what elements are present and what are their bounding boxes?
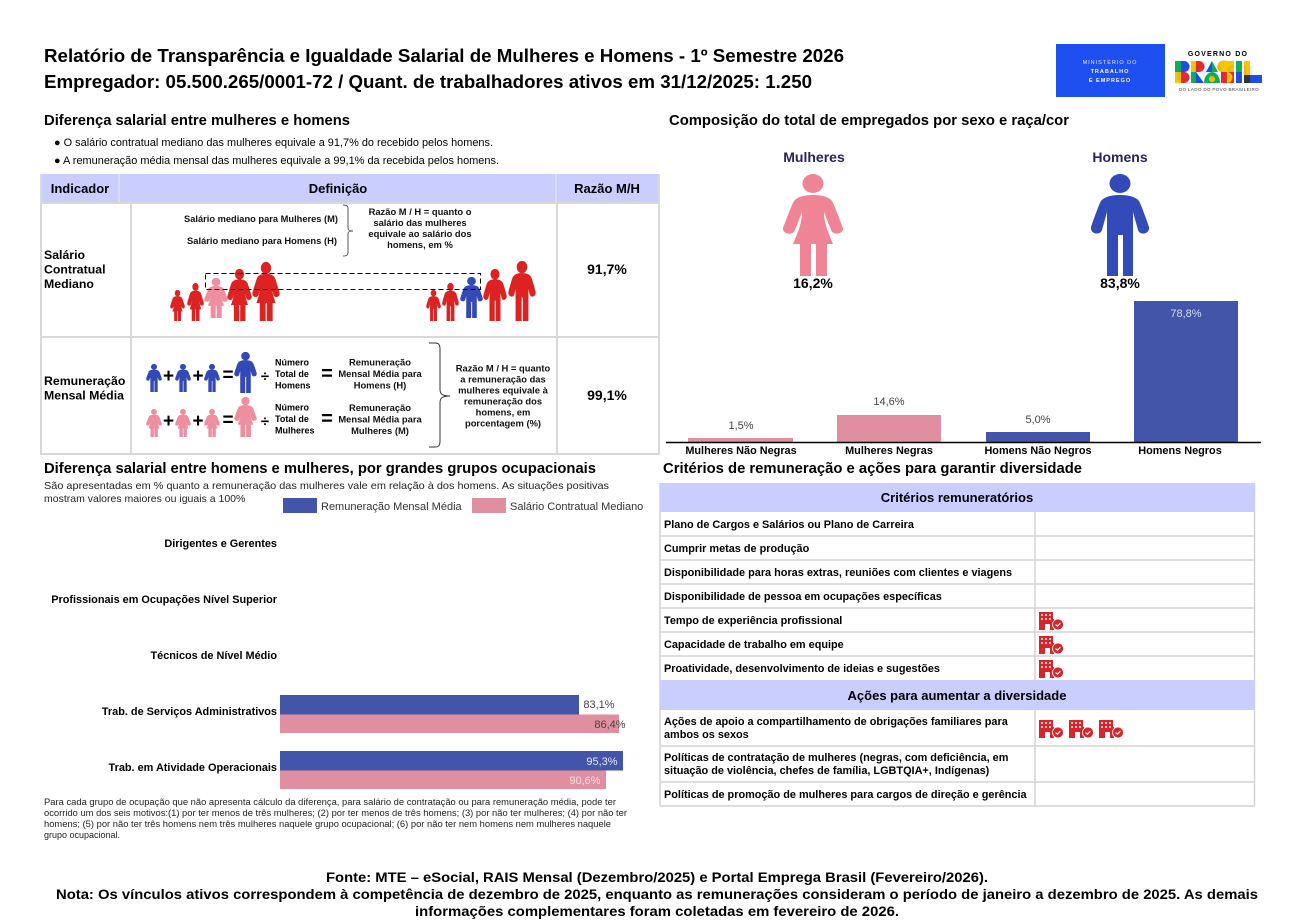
header: criteria: Critérios remuneratórios bbox=[881, 490, 1033, 505]
logo: Ministério do Trabalho e Emprego bbox=[1056, 44, 1165, 97]
title: Empregador: 05.500.265/0001-72 / Quant. de trabalhadores ativos em 31/12/2025: 1.250 bbox=[44, 72, 812, 92]
section: workforce composition bbox=[666, 113, 1261, 457]
men formula: + bbox=[163, 366, 174, 387]
ratio explanation bbox=[456, 362, 551, 428]
horizontal bar chart: Trab. de Serviços Administrativos bbox=[102, 706, 277, 718]
footnote bbox=[44, 797, 627, 840]
bullet text: median salary: ● O salário contratual mediano das mulheres equivale a 91,7% do recebido pelos homens. bbox=[54, 137, 493, 149]
women share: Mulheres bbox=[783, 149, 845, 165]
bar chart: sex and race bbox=[666, 301, 1261, 457]
row label: Mensal Média bbox=[44, 388, 124, 402]
footnote: Para cada grupo de ocupação que não apresenta cálculo da diferença, para salário de contratação ou para remuneração média, pode ter bbox=[44, 797, 616, 807]
ratio explanation: Razão M / H = quanto bbox=[456, 362, 551, 374]
footer source and note: informações complementares foram coletadas em fevereiro de 2026. bbox=[415, 903, 899, 919]
men share: Homens bbox=[1092, 149, 1148, 165]
bar chart: sex and race: Mulheres Não Negras bbox=[685, 445, 797, 457]
dashed highlight bbox=[206, 274, 480, 290]
bullet text: average pay: ● A remuneração média mensal das mulheres equivale a 99,1% da recebida pelos homens. bbox=[54, 155, 499, 167]
logo: Governo do Brasil: BRASIL bbox=[1176, 62, 1262, 85]
logo: Ministério do Trabalho e Emprego: TRABALHO bbox=[1091, 69, 1129, 75]
I bbox=[1236, 61, 1242, 72]
L bbox=[1244, 61, 1250, 75]
header: diversity actions bbox=[660, 680, 1255, 710]
horizontal bar chart: Profissionais em Ocupações Nível Superior bbox=[51, 594, 278, 606]
header: diversity actions: Ações para aumentar a diversidade bbox=[848, 688, 1066, 703]
criteria rows: Plano de Cargos e Salários ou Plano de Carreira bbox=[664, 519, 915, 531]
footnote: grupo ocupacional. bbox=[44, 830, 120, 840]
criteria rows: Tempo de experiência profissional bbox=[664, 615, 842, 627]
criteria rows: Disponibilidade para horas extras, reuniões com clientes e viagens bbox=[664, 567, 1012, 579]
women formula: Mensal Média para bbox=[338, 414, 422, 424]
table header: Indicador bbox=[51, 181, 109, 196]
men formula: Homens (H) bbox=[354, 380, 406, 390]
icon group: men bbox=[426, 262, 535, 321]
women formula: = bbox=[321, 408, 333, 430]
ratio explanation: Razão M / H = quanto o bbox=[369, 206, 472, 217]
men formula: Mensal Média para bbox=[338, 368, 422, 379]
women formula: Mulheres bbox=[275, 426, 315, 436]
women share: 16,2% bbox=[793, 275, 833, 291]
action rows bbox=[664, 716, 1027, 801]
logo: Governo do Brasil bbox=[1175, 51, 1262, 92]
bar chart: sex and race: 78,8% bbox=[1170, 308, 1202, 320]
women share bbox=[783, 149, 845, 291]
footnote: homens; (5) por não ter três homens nem três mulheres naquele grupo ocupacional; (6) por não ter nem homens nem mulheres naquele bbox=[44, 819, 611, 829]
table header bbox=[40, 174, 659, 202]
horizontal bar chart: 95,3% bbox=[586, 756, 618, 768]
icon: woman bbox=[783, 174, 843, 276]
legend bbox=[283, 498, 643, 513]
median salary labels: Salário mediano para Homens (H) bbox=[187, 236, 337, 246]
horizontal bar chart: 86,4% bbox=[594, 719, 626, 731]
horizontal bar chart: 90,6% bbox=[569, 775, 601, 787]
women formula: Total de bbox=[275, 414, 309, 424]
men formula: Total de bbox=[275, 369, 309, 379]
ratio explanation: homens, em % bbox=[387, 239, 453, 250]
bar chart: sex and race: Homens Negros bbox=[1138, 445, 1222, 457]
footnote: ocorrido um dos seis motivos:(1) por ter menos de três mulheres; (2) por ter menos de três homens; (3) por não ter mulheres; (4) por não ter bbox=[44, 808, 627, 818]
ratio explanation: mulheres equivale à bbox=[458, 384, 549, 396]
icons: company adopts criterion bbox=[1039, 612, 1064, 678]
ratio value: 99,1% bbox=[587, 387, 627, 403]
footer source and note bbox=[56, 869, 1258, 919]
men formula bbox=[146, 352, 422, 393]
footer source and note: Fonte: MTE – eSocial, RAIS Mensal (Dezembro/2025) e Portal Emprega Brasil (Fevereiro/2026). bbox=[326, 869, 988, 885]
heading: criteria: Critérios de remuneração e ações para garantir diversidade bbox=[663, 461, 1082, 477]
subtitle: São apresentadas em % quanto a remuneração das mulheres vale em relação à dos homens. As situações positivas bbox=[44, 480, 609, 492]
ratio value: 91,7% bbox=[587, 261, 627, 277]
women formula: = bbox=[222, 410, 234, 431]
icon: man bbox=[1091, 174, 1149, 276]
men formula: Remuneração bbox=[349, 356, 411, 368]
action rows: ambos os sexos bbox=[664, 729, 749, 741]
section: salary difference summary bbox=[44, 113, 499, 167]
subtitle bbox=[44, 480, 609, 505]
men formula: = bbox=[222, 365, 234, 386]
logos bbox=[1056, 44, 1262, 97]
row: average monthly pay bbox=[44, 343, 627, 447]
row label: Mediano bbox=[44, 277, 94, 291]
bar chart: sex and race: Homens Não Negros bbox=[984, 445, 1092, 457]
row label: Contratual bbox=[44, 262, 106, 276]
title: Relatório de Transparência e Igualdade Salarial de Mulheres e Homens - 1º Semestre 2026 bbox=[44, 46, 844, 66]
women formula: Mulheres (M) bbox=[351, 425, 409, 436]
women formula bbox=[146, 397, 422, 437]
section: criteria and actions bbox=[660, 461, 1255, 806]
criteria rows: Disponibilidade de pessoa em ocupações específicas bbox=[664, 591, 942, 603]
row: median contractual salary bbox=[44, 205, 627, 321]
footer source and note: Nota: Os vínculos ativos correspondem à competência de dezembro de 2025, enquanto as remunerações consideram o período de janeiro a dezembro de 2025. As demais bbox=[56, 886, 1258, 902]
horizontal bar chart: Técnicos de Nível Médio bbox=[150, 650, 277, 662]
horizontal bar chart: Dirigentes e Gerentes bbox=[164, 538, 277, 550]
logo: Ministério do Trabalho e Emprego: E EMPREGO bbox=[1089, 78, 1131, 84]
ratio explanation: salário das mulheres bbox=[373, 217, 467, 228]
heading: salary difference: Diferença salarial entre mulheres e homens bbox=[44, 113, 350, 129]
section: occupational groups bbox=[44, 461, 643, 840]
ratio explanation: porcentagem (%) bbox=[465, 418, 541, 428]
row label: Salário bbox=[44, 248, 85, 262]
women formula: + bbox=[192, 411, 204, 432]
panel: indicators table bbox=[40, 174, 659, 455]
bar chart: sex and race: 14,6% bbox=[873, 396, 905, 408]
criteria rows: Capacidade de trabalho em equipe bbox=[664, 639, 844, 651]
row label bbox=[44, 248, 106, 291]
bar chart: sex and race: Mulheres Negras bbox=[845, 445, 933, 457]
table header: Razão M/H bbox=[574, 181, 640, 196]
subtitle: mostram valores maiores ou iguais a 100% bbox=[44, 493, 245, 505]
logo: Governo do Brasil: DO LADO DO POVO BRASILEIRO bbox=[1179, 87, 1259, 92]
brace bbox=[429, 343, 450, 447]
men share bbox=[1091, 149, 1149, 291]
women formula: Remuneração bbox=[349, 402, 411, 413]
action rows: Políticas de contratação de mulheres (negras, com deficiência, em bbox=[664, 752, 1009, 764]
criteria rows: Proatividade, desenvolvimento de ideias e sugestões bbox=[664, 663, 940, 675]
legend: Salário Contratual Mediano bbox=[510, 501, 643, 513]
men formula: Homens bbox=[275, 380, 311, 390]
ratio explanation bbox=[368, 206, 472, 250]
men formula: Número bbox=[275, 358, 310, 368]
logo: Governo do Brasil: GOVERNO DO bbox=[1188, 51, 1248, 58]
horizontal bar chart: 83,1% bbox=[583, 699, 615, 711]
ratio explanation: a remuneração das bbox=[460, 374, 546, 384]
horizontal bar chart: Trab. em Atividade Operacionais bbox=[109, 762, 277, 774]
median salary labels bbox=[184, 214, 338, 246]
table: criteria and diversity actions bbox=[660, 483, 1255, 806]
row label: Remuneração bbox=[44, 374, 126, 388]
title bbox=[44, 46, 844, 92]
A bbox=[1206, 61, 1212, 72]
men formula: ÷ bbox=[261, 368, 269, 385]
women formula: ÷ bbox=[261, 413, 269, 430]
table header: Definição bbox=[309, 181, 367, 196]
women formula: + bbox=[163, 411, 174, 432]
bar chart: sex and race: 5,0% bbox=[1025, 414, 1051, 426]
action rows: situação de violência, chefes de família, LGBTQIA+, Indígenas) bbox=[664, 765, 990, 777]
ratio explanation: remuneração dos bbox=[464, 396, 542, 406]
criteria rows bbox=[664, 519, 1012, 675]
criteria rows: Cumprir metas de produção bbox=[664, 543, 810, 555]
men share: 83,8% bbox=[1100, 275, 1140, 291]
R bbox=[1191, 61, 1196, 72]
heading: occupational groups: Diferença salarial entre homens e mulheres, por grandes grupos ocupacionais bbox=[44, 461, 596, 477]
heading: composition: Composição do total de empregados por sexo e raça/cor bbox=[669, 113, 1069, 129]
bar chart: sex and race: 1,5% bbox=[728, 420, 754, 432]
action rows: Ações de apoio a compartilhamento de obrigações familiares para bbox=[664, 716, 1009, 728]
icon group: women bbox=[170, 263, 279, 321]
ratio explanation: homens, em bbox=[476, 406, 530, 418]
legend: Remuneração Mensal Média bbox=[321, 501, 463, 513]
logo: Ministério do Trabalho e Emprego: MINISTÉRIO DO bbox=[1083, 59, 1137, 66]
icons: company adopts action bbox=[1039, 720, 1124, 738]
horizontal bar chart bbox=[51, 538, 626, 789]
women formula: Número bbox=[275, 402, 310, 412]
S bbox=[1217, 60, 1234, 72]
men formula: + bbox=[192, 366, 204, 387]
action rows: Políticas de promoção de mulheres para cargos de direção e gerência bbox=[664, 789, 1027, 801]
men formula: = bbox=[321, 363, 333, 385]
brace bbox=[343, 205, 353, 256]
ratio explanation: equivale ao salário dos bbox=[368, 228, 472, 239]
median salary labels: Salário mediano para Mulheres (M) bbox=[184, 214, 338, 224]
B bbox=[1175, 61, 1181, 72]
header: criteria bbox=[660, 483, 1255, 512]
row label bbox=[44, 374, 126, 402]
